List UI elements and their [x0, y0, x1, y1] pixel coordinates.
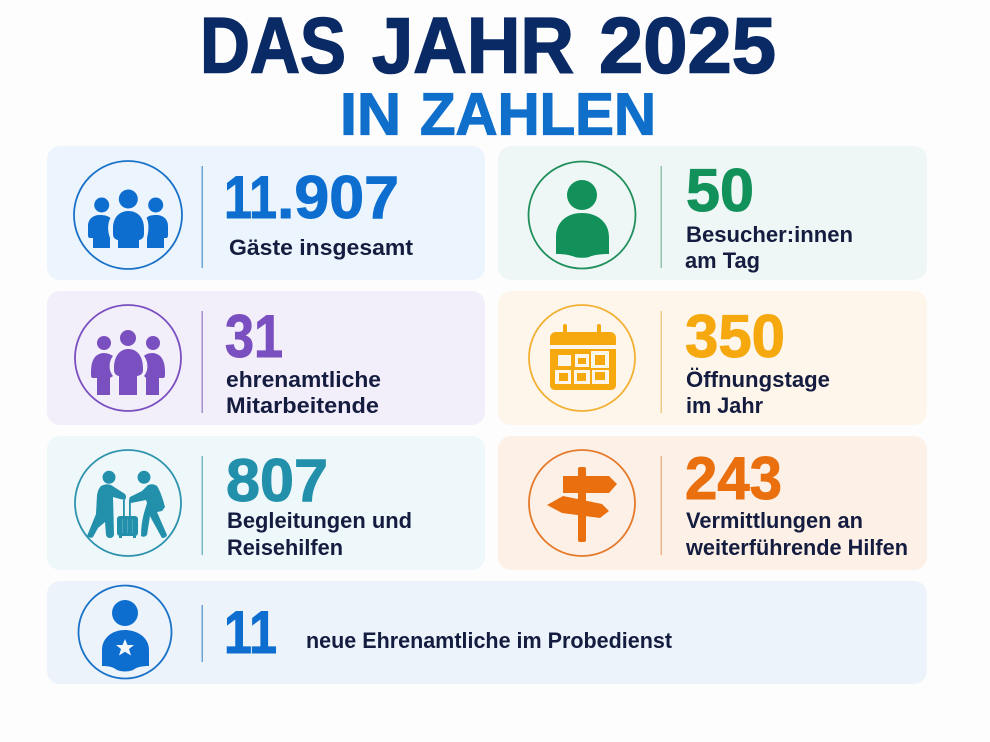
- panel: ehrenamtliche Mitarbeitende: Mitarbeitende: [226, 393, 379, 418]
- panel: Vermittlungen: weiterführende Hilfen: [685, 535, 908, 560]
- divider: [202, 311, 203, 413]
- panel: Begleitungen und Reisehilfen: [47, 436, 485, 570]
- title: DAS: [200, 0, 346, 90]
- label: neue Ehrenamtliche im Probedienst: [306, 628, 672, 653]
- panel: Besucher:innen am Tag: am Tag: [685, 248, 760, 273]
- title: 2025: [599, 0, 776, 90]
- title: [200, 0, 776, 148]
- number: 11: [224, 599, 277, 666]
- panel: ehrenamtliche Mitarbeitende: [47, 291, 485, 425]
- icon: calendar: [529, 305, 635, 411]
- number: .907: [277, 164, 399, 231]
- icon: two people with suitcase: [75, 450, 181, 556]
- icon: three people blue: [74, 161, 182, 269]
- label: Begleitungen und: [227, 508, 412, 533]
- icon: person green: [528, 162, 636, 268]
- panel: Besucher:innen am Tag: [498, 146, 927, 280]
- divider: [202, 456, 203, 555]
- divider: [660, 456, 662, 555]
- panel: Begleitungen und Reisehilfen: Reisehilfen: [227, 535, 343, 560]
- label: ehrenamtliche: [226, 367, 381, 392]
- number: 243: [685, 445, 782, 512]
- divider: [660, 311, 662, 413]
- label: Besucher:innen: [686, 222, 853, 247]
- divider: [202, 605, 203, 662]
- title: JAHR: [372, 0, 574, 90]
- label: Öffnungstage: [686, 367, 830, 392]
- panel: Öffnungstage im Jahr: im Jahr: [686, 393, 763, 418]
- label: Gäste insgesamt: [229, 235, 414, 260]
- title: IN: [340, 82, 401, 148]
- panel: Vermittlungen: [498, 436, 927, 570]
- divider: [660, 166, 662, 268]
- icon: three people purple: [75, 305, 181, 411]
- divider: [202, 166, 203, 268]
- title: ZAHLEN: [420, 82, 656, 148]
- panel: neue Ehrenamtliche im Probedienst: [47, 581, 927, 684]
- number: 50: [686, 157, 754, 224]
- number: 807: [226, 447, 328, 514]
- number: 11: [224, 164, 277, 231]
- icon: signpost: [529, 450, 635, 556]
- number: 31: [225, 303, 283, 370]
- number: 350: [685, 303, 785, 370]
- panel: Öffnungstage im Jahr: [498, 291, 927, 425]
- label: Vermittlungen an: [686, 508, 863, 533]
- icon: person with star: [78, 586, 172, 678]
- panel: Gäste insgesamt: [47, 146, 485, 280]
